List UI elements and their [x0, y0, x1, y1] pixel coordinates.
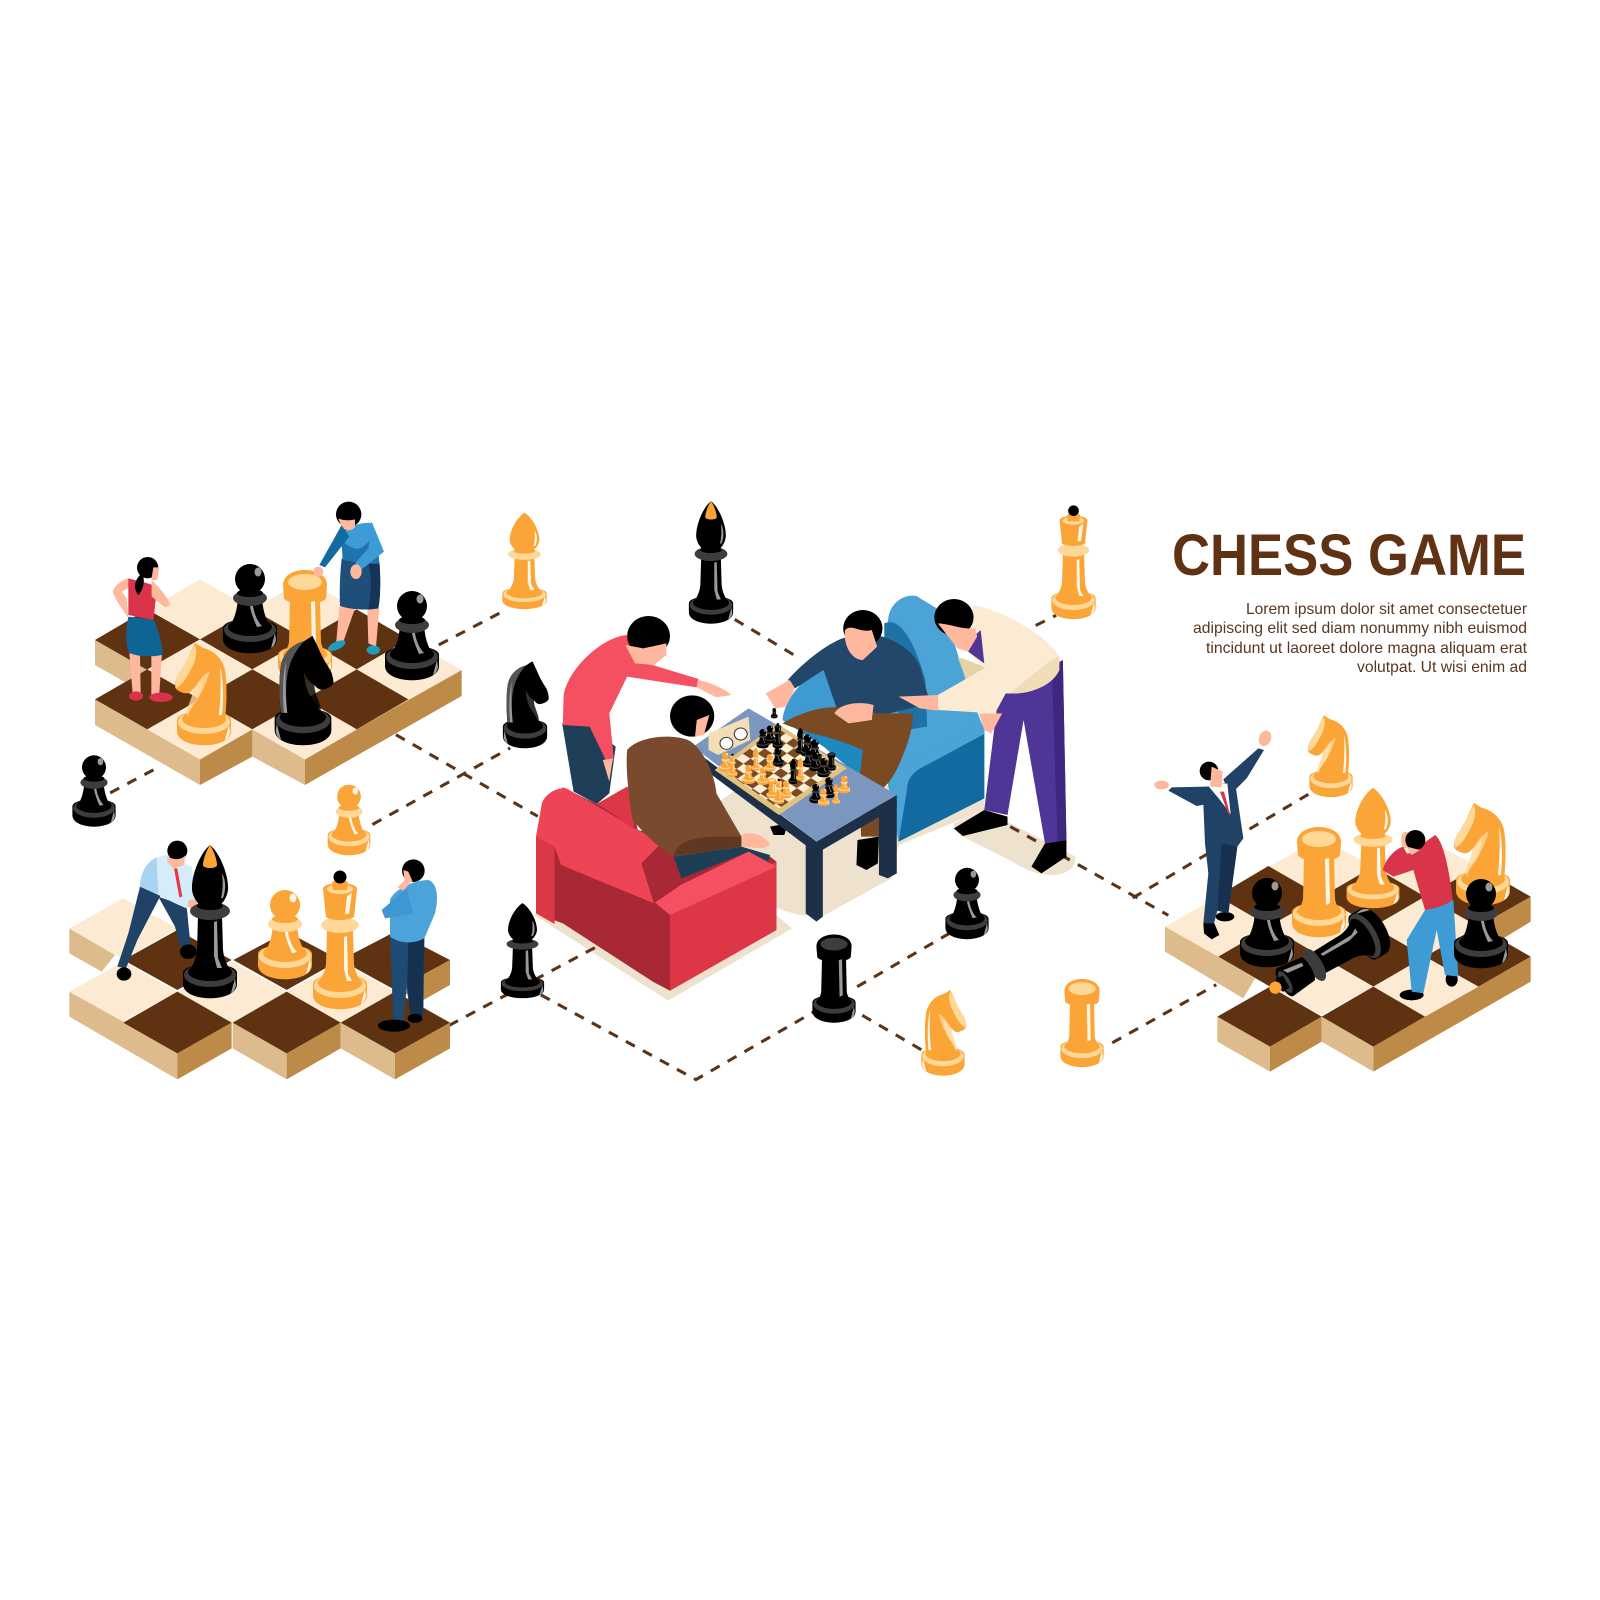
isolated piece: black rook: [812, 934, 856, 1023]
isolated piece: black bishop with orange tip: [689, 501, 733, 624]
orange knight on right board: [1454, 803, 1510, 905]
orange knight on top-left board: [175, 643, 231, 745]
orange bishop on right board: [1347, 788, 1399, 908]
figure: man in red holding his head: [1383, 830, 1458, 1000]
figure: man in blue sweater: [378, 859, 437, 1032]
figure: standing man in cream sweater: [899, 599, 1066, 873]
isolated piece: orange bishop: [502, 513, 547, 609]
isolated piece: black pawn right: [945, 868, 989, 939]
isolated piece: orange rook: [1060, 979, 1104, 1067]
body text: [1193, 601, 1528, 676]
figure: suit man celebrating: [1154, 729, 1273, 939]
central scene: players around the table: [536, 596, 1066, 991]
isolated piece: orange pawn: [328, 785, 370, 855]
figure: standing man in coral sweater: [562, 616, 731, 804]
panel: right chessboard: [1165, 838, 1531, 1072]
dashed connector lines: [110, 609, 1309, 1080]
panel: top-left chessboard: [95, 579, 462, 785]
title: CHESS GAME: [1172, 523, 1526, 588]
black knight on top-left board: [275, 636, 333, 745]
orange rook on right board: [1292, 827, 1346, 937]
isolated piece: orange knight facing right: [921, 990, 966, 1076]
black pawn on right board: [1240, 878, 1294, 967]
black pawn front on right board: [1454, 879, 1508, 968]
isolated piece: black pawn: [72, 755, 116, 827]
fallen black king: [1257, 903, 1397, 1013]
figure: woman in blue: [313, 502, 384, 655]
figure: woman in red: [113, 557, 173, 702]
body text: tincidunt ut laoreet dolore magna aliquam erat: [1206, 640, 1528, 657]
black pawn on top-left board: [223, 564, 277, 653]
table: [693, 708, 897, 922]
panel: bottom-left chessboard: [69, 898, 450, 1079]
body text: volutpat. Ut wisi enim ad: [1357, 659, 1527, 676]
miniature chessboard with pieces: [715, 708, 850, 815]
isolated piece: orange king: [1051, 505, 1096, 619]
isolated piece: black bishop: [501, 903, 544, 998]
orange rook on top-left board: [278, 570, 332, 680]
figure: man in white shirt pushing bishop: [117, 841, 198, 981]
isolated piece: orange knight facing left: [1308, 715, 1353, 797]
isolated piece: black knight: [503, 661, 549, 748]
figure: seated man in navy sweater: [766, 610, 928, 870]
body text: Lorem ipsum dolor sit amet consectetuer: [1246, 601, 1528, 618]
body text: adipiscing elit sed diam nonummy nibh euismod: [1193, 620, 1527, 637]
chess clock: [709, 717, 750, 755]
orange pawn on bottom-left board: [258, 890, 312, 979]
blue armchair: [782, 596, 984, 842]
black pawn right on top-left board: [385, 591, 439, 680]
red armchair: [536, 787, 776, 991]
floor shadows under the central scene: [534, 767, 1076, 1001]
figure: seated man in brown jacket: [627, 695, 770, 878]
black bishop on bottom-left board: [183, 845, 237, 998]
orange king on bottom-left board: [313, 870, 367, 1009]
